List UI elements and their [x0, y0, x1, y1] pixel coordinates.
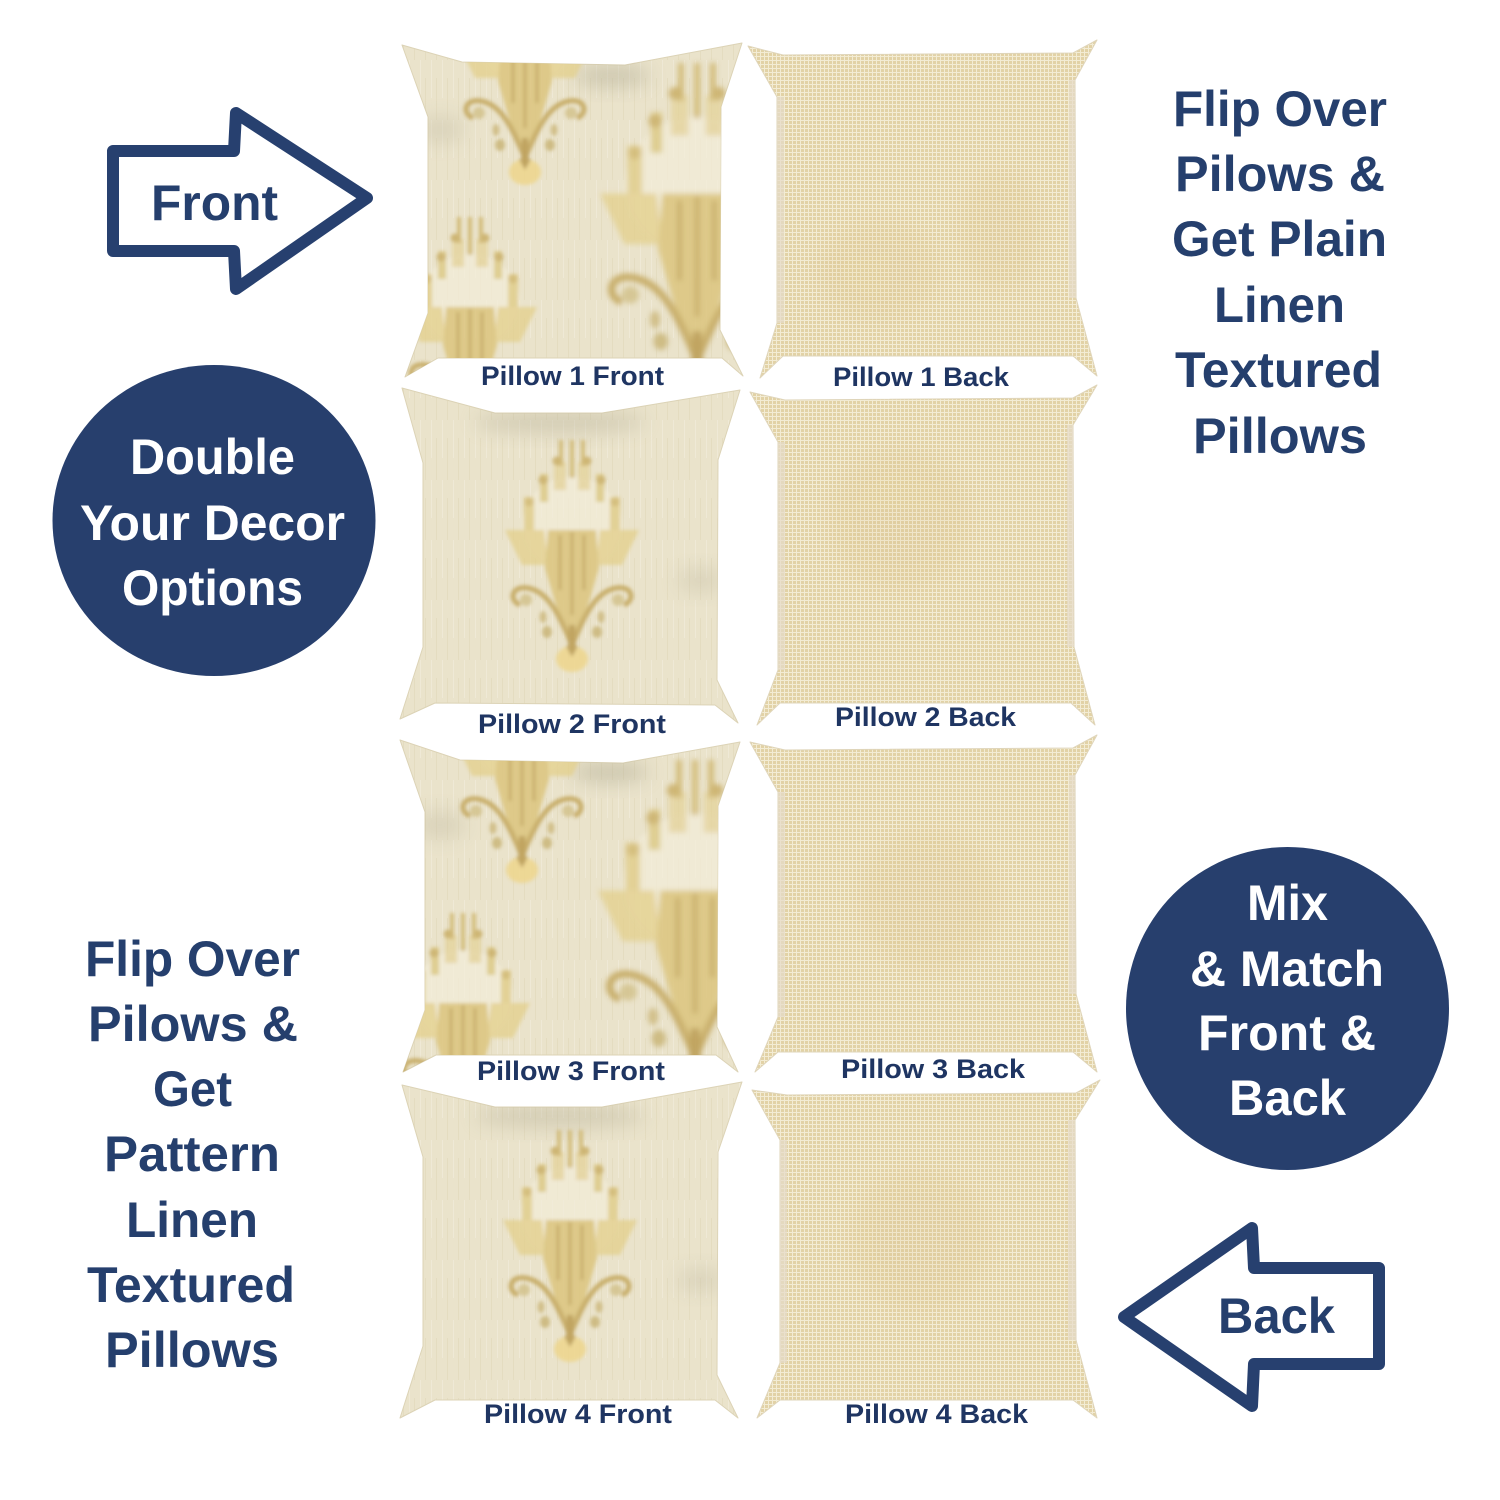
- pillow 4 back: [752, 1080, 1100, 1429]
- pillow 2 back: [750, 385, 1097, 732]
- label: Pillow 3 Back: Pillow 3 Back: [841, 1054, 1026, 1084]
- callout circle: Double Your Decor Options: Options: [122, 560, 303, 616]
- text block: flip over to plain: Get Plain: [1172, 211, 1387, 267]
- arrow: Back: [1124, 1228, 1379, 1406]
- callout circle: Double Your Decor Options: Your Decor: [80, 495, 345, 551]
- label: Pillow 2 Back: Pillow 2 Back: [835, 702, 1017, 732]
- callout circle: Mix and Match: [1126, 847, 1449, 1170]
- label: Pillow 1 Back: Pillow 1 Back: [833, 362, 1010, 392]
- pillow 3 front: [400, 740, 740, 1080]
- text block: flip over to pattern: Linen: [126, 1192, 258, 1248]
- text block: flip over to pattern: Pattern: [104, 1126, 280, 1182]
- callout circle: Mix and Match: Front &: [1198, 1005, 1376, 1061]
- label: Pillow 2 Front: Pillow 2 Front: [478, 709, 666, 739]
- text block: flip over to plain: Linen: [1214, 277, 1345, 333]
- label: Back: Back: [1218, 1288, 1335, 1344]
- callout circle: Mix and Match: & Match: [1190, 941, 1384, 997]
- pillow 1 back: [748, 40, 1097, 392]
- text block: flip over to plain: [1172, 81, 1387, 464]
- label: Front: Front: [151, 175, 278, 231]
- arrow: Front: [113, 113, 367, 289]
- label: Pillow 1 Front: Pillow 1 Front: [481, 361, 664, 391]
- text block: flip over to pattern: Pilows &: [88, 996, 298, 1052]
- pillow 1 front: [402, 42, 744, 386]
- text block: flip over to pattern: Flip Over: [85, 931, 300, 987]
- pillow 3 back: [750, 735, 1097, 1084]
- callout circle: Mix and Match: Mix: [1247, 875, 1328, 931]
- pillow 4 front: [400, 1082, 742, 1429]
- text block: flip over to pattern: Pillows: [105, 1322, 279, 1378]
- text block: flip over to plain: Pilows &: [1175, 146, 1385, 202]
- text block: flip over to pattern: Textured: [87, 1257, 295, 1313]
- label: Pillow 4 Front: Pillow 4 Front: [484, 1399, 672, 1429]
- text block: flip over to pattern: [85, 931, 300, 1378]
- callout circle: Mix and Match: Back: [1229, 1070, 1346, 1126]
- callout circle: Double Your Decor Options: Double: [130, 429, 295, 485]
- callout circle: Double Your Decor Options: [52, 365, 376, 676]
- pillow 2 front: [400, 388, 740, 739]
- text block: flip over to plain: Flip Over: [1173, 81, 1387, 137]
- text block: flip over to pattern: Get: [153, 1061, 232, 1117]
- label: Pillow 4 Back: Pillow 4 Back: [845, 1399, 1029, 1429]
- label: Pillow 3 Front: Pillow 3 Front: [477, 1056, 665, 1086]
- text block: flip over to plain: Textured: [1175, 342, 1382, 398]
- text block: flip over to plain: Pillows: [1193, 408, 1367, 464]
